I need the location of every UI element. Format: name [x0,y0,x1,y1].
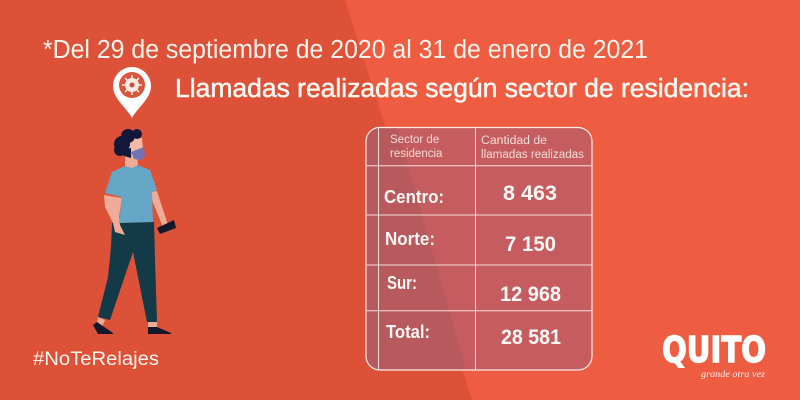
phone [157,220,176,234]
table background [366,128,592,370]
panel: data table [366,128,592,370]
row: Total: Total: [386,322,430,342]
face [126,138,143,157]
main heading: Llamadas realizadas según sector de residencia: [175,75,749,103]
column header: sector: residencia [390,148,443,160]
row: Sur: 12 968 [500,283,561,306]
row: Norte: Norte: [385,229,435,249]
row: Total [386,322,561,349]
row: Centro: 8 463 [503,182,557,205]
shoes [93,322,113,334]
row: Total: 28 581 [501,326,561,349]
row: Norte [385,229,556,256]
row: Centro [384,182,557,207]
logo: Quito: QUITO [662,330,766,371]
t-shirt [105,165,157,223]
logo: Quito [662,330,766,380]
column header: sector [390,134,443,160]
column header: sector: Sector de [390,134,439,146]
right arm [152,191,170,232]
date range heading: *Del 29 de septiembre de 2020 al 31 de enero de 2021 [43,36,648,64]
trousers [98,222,157,322]
column header: calls: Cantidad de [481,135,547,147]
hair [114,129,142,158]
darker left shade [366,128,466,370]
neck [125,155,138,168]
logo: Quito: grande otra vez [701,370,765,380]
illustration: person with mask holding phone [93,129,176,334]
row: Norte: 7 150 [505,233,556,256]
ankles [97,317,157,328]
row: Sur: Sur: [387,273,417,293]
column header: calls: llamadas realizadas [481,149,584,161]
hashtag: #NoTeRelajes [33,348,159,370]
left arm [104,195,125,235]
row: Sur [387,273,561,306]
icon: virus location pin [113,67,151,118]
mask [131,147,145,160]
row: Centro: Centro: [384,187,444,207]
column header: calls [481,135,584,161]
